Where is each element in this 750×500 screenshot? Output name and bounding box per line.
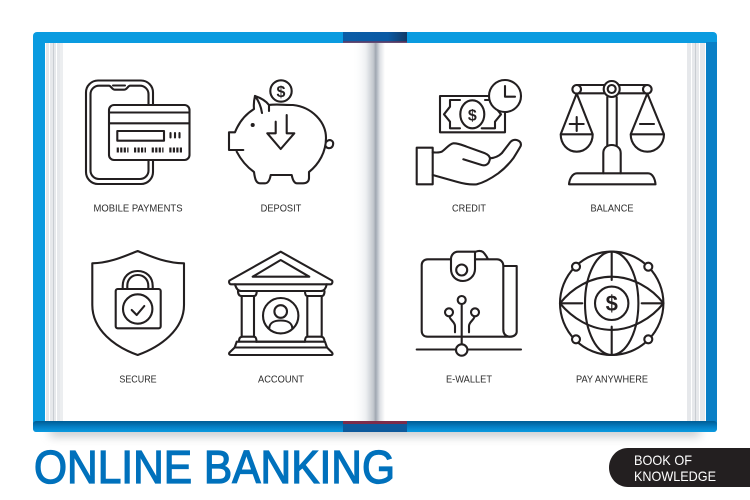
icon: account bank building: [229, 252, 333, 355]
icon: credit hand with banknote and clock: [417, 80, 521, 184]
label: account: ACCOUNT: [258, 374, 305, 386]
icon: credit hand with banknote and clock: $: [468, 107, 477, 124]
label: balance: BALANCE: [590, 203, 634, 215]
badge: book of knowledge: KNOWLEDGE: [634, 468, 716, 484]
book: cover and pages: [33, 32, 717, 436]
left page: [45, 43, 377, 421]
label: e-wallet: E-WALLET: [446, 374, 493, 386]
icon: mobile payments: [86, 80, 190, 184]
spine top: [343, 32, 407, 43]
icon: e-wallet: [417, 251, 521, 356]
label: secure: SECURE: [119, 374, 157, 386]
label: credit: CREDIT: [452, 203, 487, 215]
icon: balance scales: [561, 81, 664, 184]
icon: deposit piggy bank: $: [277, 84, 286, 101]
title: ONLINE BANKING: [34, 441, 395, 493]
icon: pay anywhere globe: $: [606, 291, 618, 316]
badge: book of knowledge: BOOK OF: [634, 452, 692, 468]
icon: pay anywhere globe: [560, 252, 663, 355]
spine bottom: [343, 421, 407, 432]
badge: book of knowledge: [609, 448, 750, 487]
icon: secure shield with padlock: [92, 251, 184, 355]
label: mobile payments: MOBILE PAYMENTS: [94, 203, 182, 215]
icon: deposit piggy bank: [229, 80, 333, 183]
label: pay anywhere: PAY ANYWHERE: [576, 374, 648, 386]
right page: [376, 43, 706, 421]
label: deposit: DEPOSIT: [261, 203, 302, 215]
